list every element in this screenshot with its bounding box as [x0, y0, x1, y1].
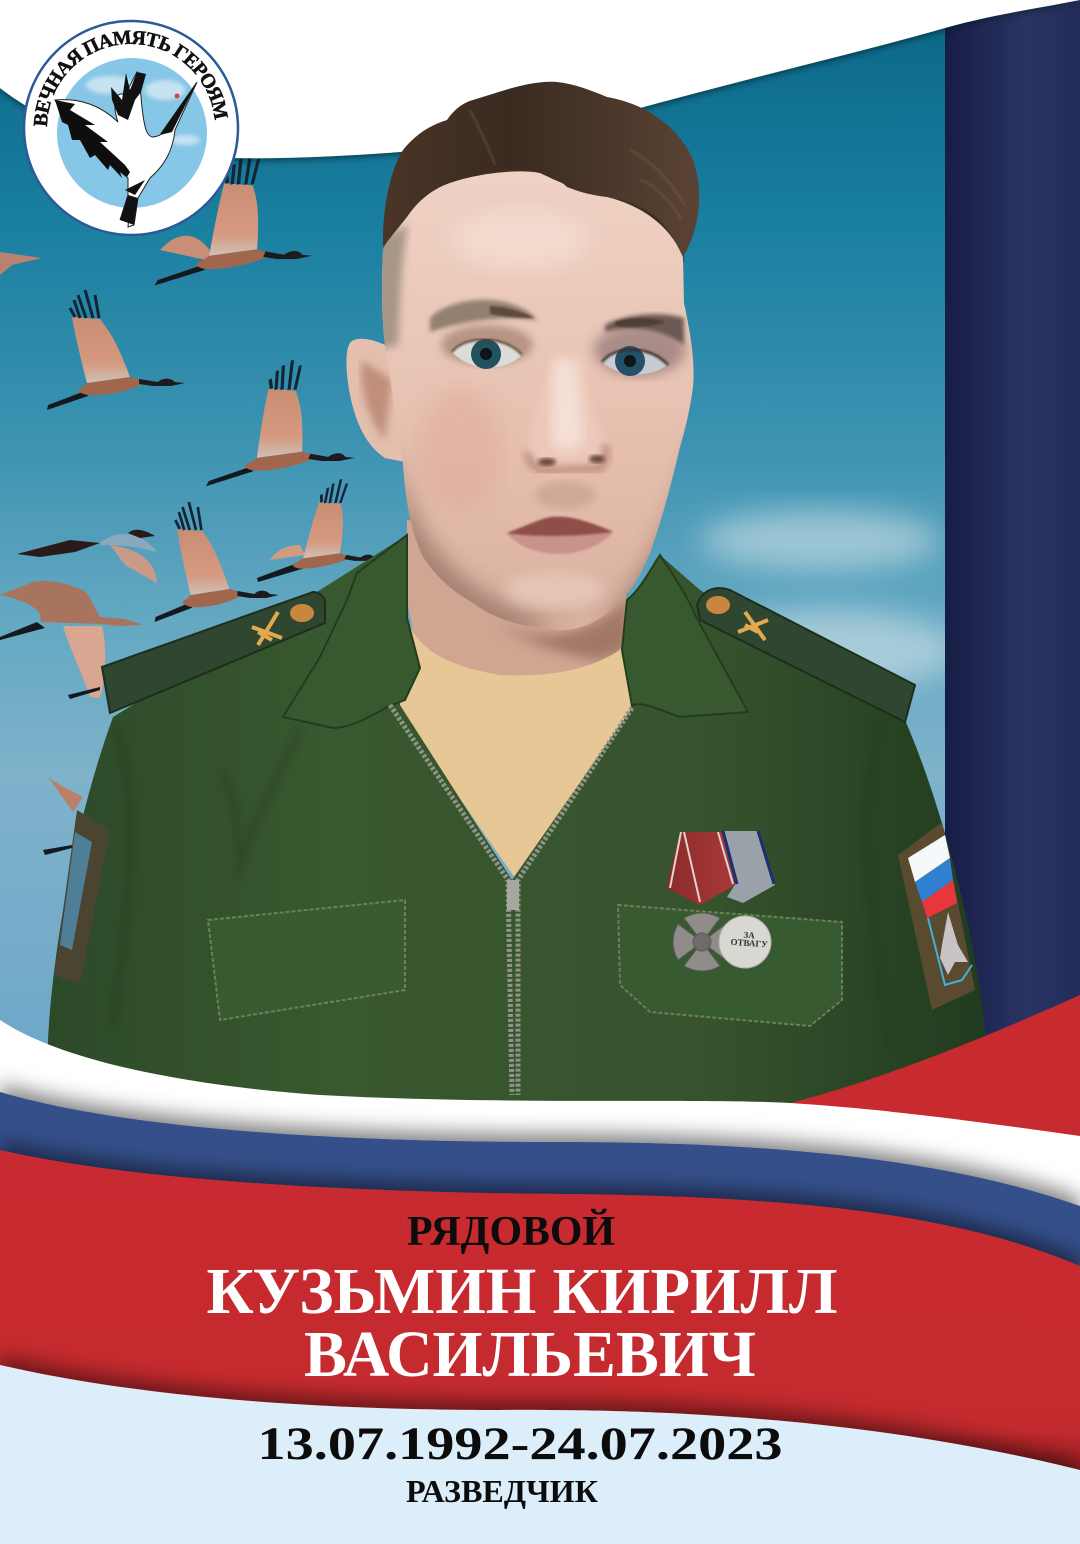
logo sky	[57, 58, 207, 208]
dark navy side panel	[945, 0, 1080, 1060]
blue band	[0, 1092, 1080, 1300]
crane 5	[257, 479, 421, 582]
right red wedge	[790, 995, 1080, 1140]
left sleeve patch	[54, 810, 110, 985]
clouds	[700, 510, 960, 690]
hair underlayer	[385, 130, 684, 262]
medals	[666, 831, 775, 971]
left jaw shadow	[402, 460, 556, 630]
logo: Вечная память героям	[22, 20, 240, 236]
forehead highlight	[455, 212, 585, 270]
top white wave	[0, 0, 1080, 158]
crane 8	[0, 252, 42, 275]
left eye	[452, 339, 522, 369]
silver cross	[673, 913, 731, 971]
crane 3	[206, 360, 392, 486]
logo clouds	[86, 76, 200, 145]
rank: РЯДОВОЙ	[407, 1209, 615, 1255]
crane 9	[43, 777, 83, 855]
ribbon: medal	[723, 831, 775, 903]
left cheek blush	[424, 394, 496, 500]
eye sockets	[441, 325, 533, 365]
sky background	[0, 0, 950, 1110]
silver medal	[719, 916, 771, 968]
chin shadow	[490, 595, 630, 660]
medals: ЗА	[743, 930, 756, 940]
face	[375, 82, 700, 640]
eyebrows	[430, 300, 537, 332]
logo title: ВЕЧНАЯ ПАМЯТЬ ГЕРОЯМ	[34, 30, 228, 127]
crane 1	[155, 154, 356, 286]
medals: ОТВАГУ	[730, 937, 769, 949]
ear	[346, 339, 405, 462]
right cheek shadow	[600, 471, 674, 617]
chin highlight	[505, 572, 605, 608]
crane 7	[0, 581, 143, 699]
nose	[527, 360, 607, 472]
jacket folds	[112, 720, 890, 1050]
neck	[407, 520, 628, 690]
lips	[507, 517, 613, 554]
hair	[383, 82, 699, 257]
left shoulder strap	[102, 592, 325, 713]
right shoulder strap	[697, 588, 915, 722]
crane 2	[47, 290, 185, 410]
jacket body	[48, 535, 985, 1120]
ribbon: order	[666, 832, 735, 905]
right pocket	[618, 905, 842, 1026]
right sleeve patch	[898, 822, 975, 1010]
name line 2: ВАСИЛЬЕВИЧ	[304, 1318, 756, 1391]
left collar	[283, 535, 420, 728]
crane 4	[155, 502, 279, 622]
right collar	[622, 555, 748, 717]
logo crane	[55, 72, 197, 227]
philtrum shadow	[535, 481, 595, 509]
left pocket	[208, 900, 405, 1020]
light blue footer	[0, 1365, 1080, 1544]
crane flock	[0, 154, 421, 855]
logo disc	[24, 21, 238, 235]
side fade	[375, 225, 408, 350]
t-shirt	[395, 618, 640, 878]
red band	[0, 1150, 1080, 1480]
right eye	[602, 346, 668, 376]
zipper	[390, 705, 632, 1095]
name line 1: КУЗЬМИН КИРИЛЛ	[206, 1255, 838, 1328]
crane 6	[17, 530, 157, 583]
role: РАЗВЕДЧИК	[406, 1473, 598, 1509]
dates: 13.07.1992-24.07.2023	[258, 1418, 782, 1470]
bottom white wave	[0, 1020, 1080, 1300]
